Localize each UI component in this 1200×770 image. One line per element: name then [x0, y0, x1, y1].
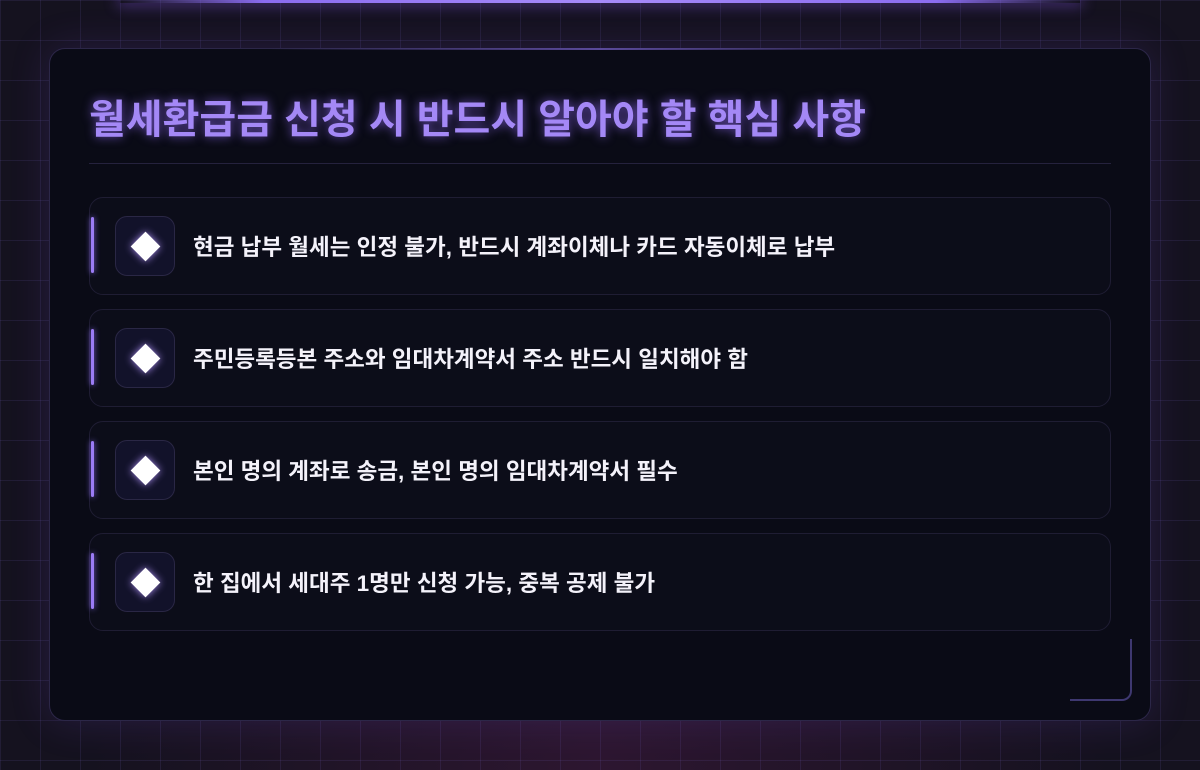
- top glow bar: [120, 0, 1080, 3]
- text 4: 한 집에서 세대주 1명만 신청 가능, 중복 공제 불가: [193, 571, 655, 596]
- item 1: [89, 197, 1111, 295]
- corner bracket decoration: [1070, 639, 1132, 701]
- title: 월세환급금 신청 시 반드시 알아야 할 핵심 사항: [89, 98, 866, 142]
- item 2: [89, 309, 1111, 407]
- item 4: [89, 533, 1111, 631]
- icon: diamond: [115, 328, 175, 388]
- icon: diamond: [115, 216, 175, 276]
- item 3: [89, 421, 1111, 519]
- icon: diamond: [115, 440, 175, 500]
- text 3: 본인 명의 계좌로 송금, 본인 명의 임대차계약서 필수: [193, 459, 678, 484]
- icon: diamond: [115, 552, 175, 612]
- text 2: 주민등록등본 주소와 임대차계약서 주소 반드시 일치해야 함: [193, 347, 748, 372]
- text 1: 현금 납부 월세는 인정 불가, 반드시 계좌이체나 카드 자동이체로 납부: [193, 235, 835, 260]
